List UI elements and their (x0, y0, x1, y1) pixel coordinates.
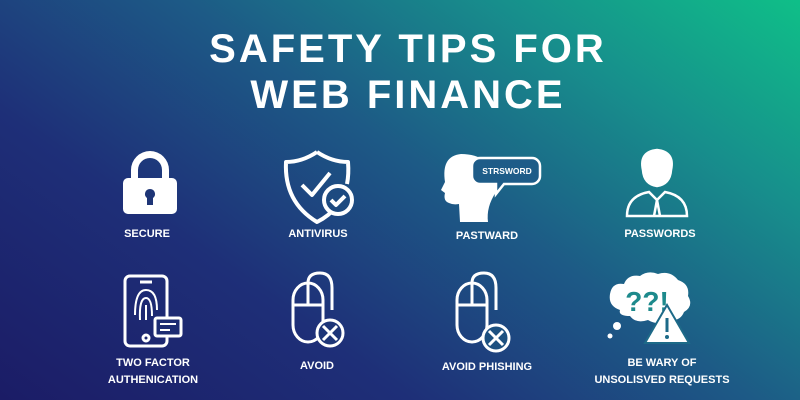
title: WEB FINANCE (250, 73, 566, 117)
icon: mouse phishing (457, 273, 509, 351)
label: antivirus: ANTIVIRUS (288, 228, 348, 240)
title: SAFETY TIPS FOR (209, 27, 607, 71)
label: two factor: TWO FACTOR (116, 357, 190, 369)
label: be wary: UNSOLISVED REQUESTS (594, 374, 730, 386)
label: pastward: PASTWARD (456, 230, 518, 242)
title (209, 27, 607, 117)
icon: head with speech bubble (441, 154, 540, 222)
label: avoid phishing: AVOID PHISHING (442, 361, 532, 373)
icon: head with speech bubble: STRSWORD (482, 166, 532, 176)
icon: mouse avoid (293, 273, 343, 346)
label: secure: SECURE (124, 228, 170, 240)
icon: shield (286, 152, 352, 222)
icon: phone fingerprint (125, 276, 181, 346)
label: two factor: AUTHENICATION (108, 374, 198, 386)
label: avoid: AVOID (300, 360, 334, 372)
icon: thought cloud warning (608, 272, 690, 343)
label: be wary (594, 357, 730, 386)
icon: person (627, 150, 687, 216)
label: two factor (108, 357, 198, 386)
icon: thought cloud warning: ??! (625, 286, 669, 317)
label: passwords: PASSWORDS (624, 228, 696, 240)
label: be wary: BE WARY OF (627, 357, 697, 369)
icon: lock (123, 151, 177, 214)
